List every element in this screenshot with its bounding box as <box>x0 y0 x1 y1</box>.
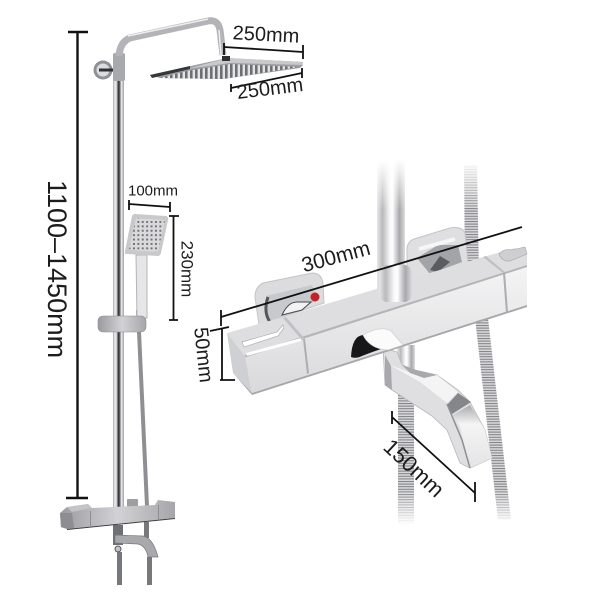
full shower set <box>60 19 303 585</box>
small spout and lower hoses <box>113 522 158 585</box>
red hot marker <box>310 292 320 302</box>
label: 300mm <box>299 237 373 277</box>
hose lower left <box>398 395 414 525</box>
label: 250mm <box>232 22 300 48</box>
dimension: rain head width <box>224 22 303 59</box>
dimension: rain head depth <box>231 68 304 104</box>
hose upper <box>464 165 479 275</box>
bath spout <box>383 348 492 468</box>
dimension: spout length <box>379 411 475 502</box>
arm highlight and shadow <box>128 19 221 55</box>
small thermostatic valve <box>60 499 175 530</box>
rain shower head <box>150 56 303 79</box>
pipe top fade <box>370 160 482 210</box>
pipe collar <box>379 265 412 302</box>
label: 250mm <box>236 74 304 104</box>
dimension: hand shower width <box>128 182 178 212</box>
left wall plate <box>255 273 324 325</box>
dimension: valve length <box>221 227 522 326</box>
dimension: valve height <box>189 326 235 384</box>
valve outlet <box>351 329 403 358</box>
slider bracket <box>98 316 146 332</box>
dimension: hand shower height <box>169 216 196 320</box>
hose bottom fade <box>390 490 515 525</box>
label: 50mm <box>189 326 217 384</box>
wall mount <box>94 60 113 80</box>
lower pipe <box>397 345 415 377</box>
riser pipe <box>377 160 405 290</box>
label: 230mm <box>178 241 196 297</box>
valve bar <box>227 247 527 395</box>
label: 100mm <box>128 182 178 200</box>
label: overall height: 1100–1450mm <box>42 180 72 358</box>
shower arm <box>119 21 223 56</box>
hose lower right <box>475 318 511 520</box>
wall collar <box>113 53 125 81</box>
enlarged valve detail <box>227 160 527 525</box>
riser rail <box>113 60 124 508</box>
right wall plate <box>407 228 468 283</box>
label: 150mm <box>379 434 449 502</box>
hand shower <box>125 214 168 318</box>
dimension: overall height <box>42 32 88 498</box>
hose small <box>138 310 147 506</box>
